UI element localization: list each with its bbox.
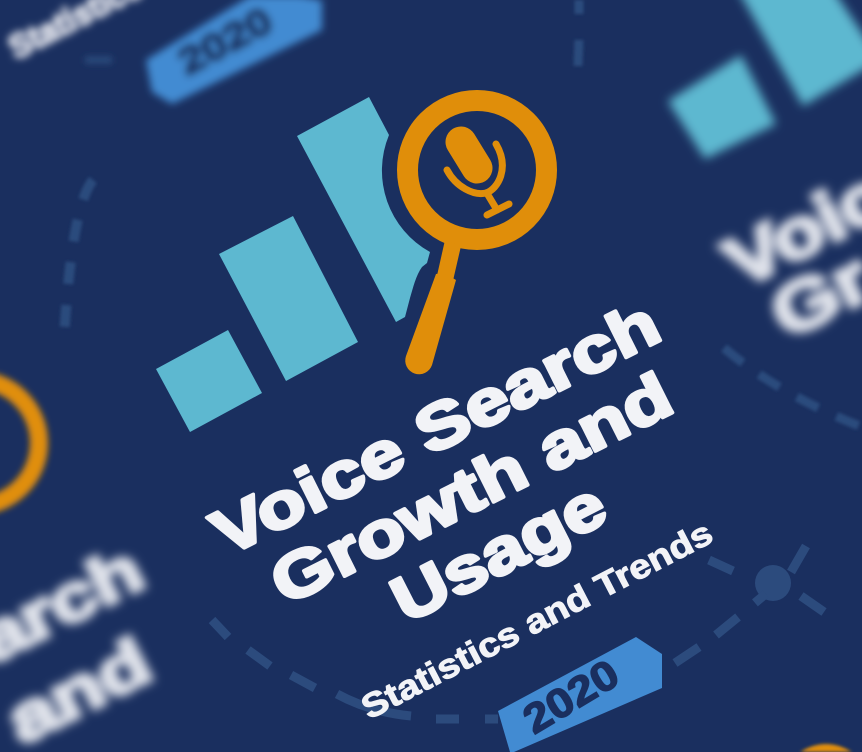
blurred top-right title fragment	[712, 156, 862, 353]
title line 1: Voice Search	[200, 286, 671, 570]
bar: tall	[297, 97, 430, 322]
blurred top-right bars	[668, 0, 862, 159]
icon: bar chart	[156, 97, 430, 432]
blurred bottom-right orange ring	[800, 744, 852, 752]
blurred left title fragment	[0, 531, 162, 752]
title line 3: Usage	[380, 468, 617, 636]
bar: medium	[219, 216, 358, 381]
magnifier handle	[405, 274, 456, 374]
badge shape	[498, 637, 662, 752]
icon: magnifier with microphone	[405, 100, 546, 374]
magnifier neck	[436, 240, 461, 285]
orbit node	[752, 565, 791, 606]
blurred top-left subtitle and badge: 2020	[172, 0, 280, 84]
badge year: 2020	[515, 650, 627, 743]
year badge	[498, 637, 662, 752]
subtitle: Statistics and Trends	[355, 514, 719, 727]
magnifier ring	[408, 100, 546, 240]
title line 2: Growth and	[259, 359, 683, 619]
icon: microphone	[447, 142, 509, 215]
bar: small	[156, 330, 262, 432]
title	[200, 286, 683, 636]
blurred left magnifier ring	[0, 380, 39, 506]
blurred top-left subtitle and badge	[2, 0, 322, 104]
